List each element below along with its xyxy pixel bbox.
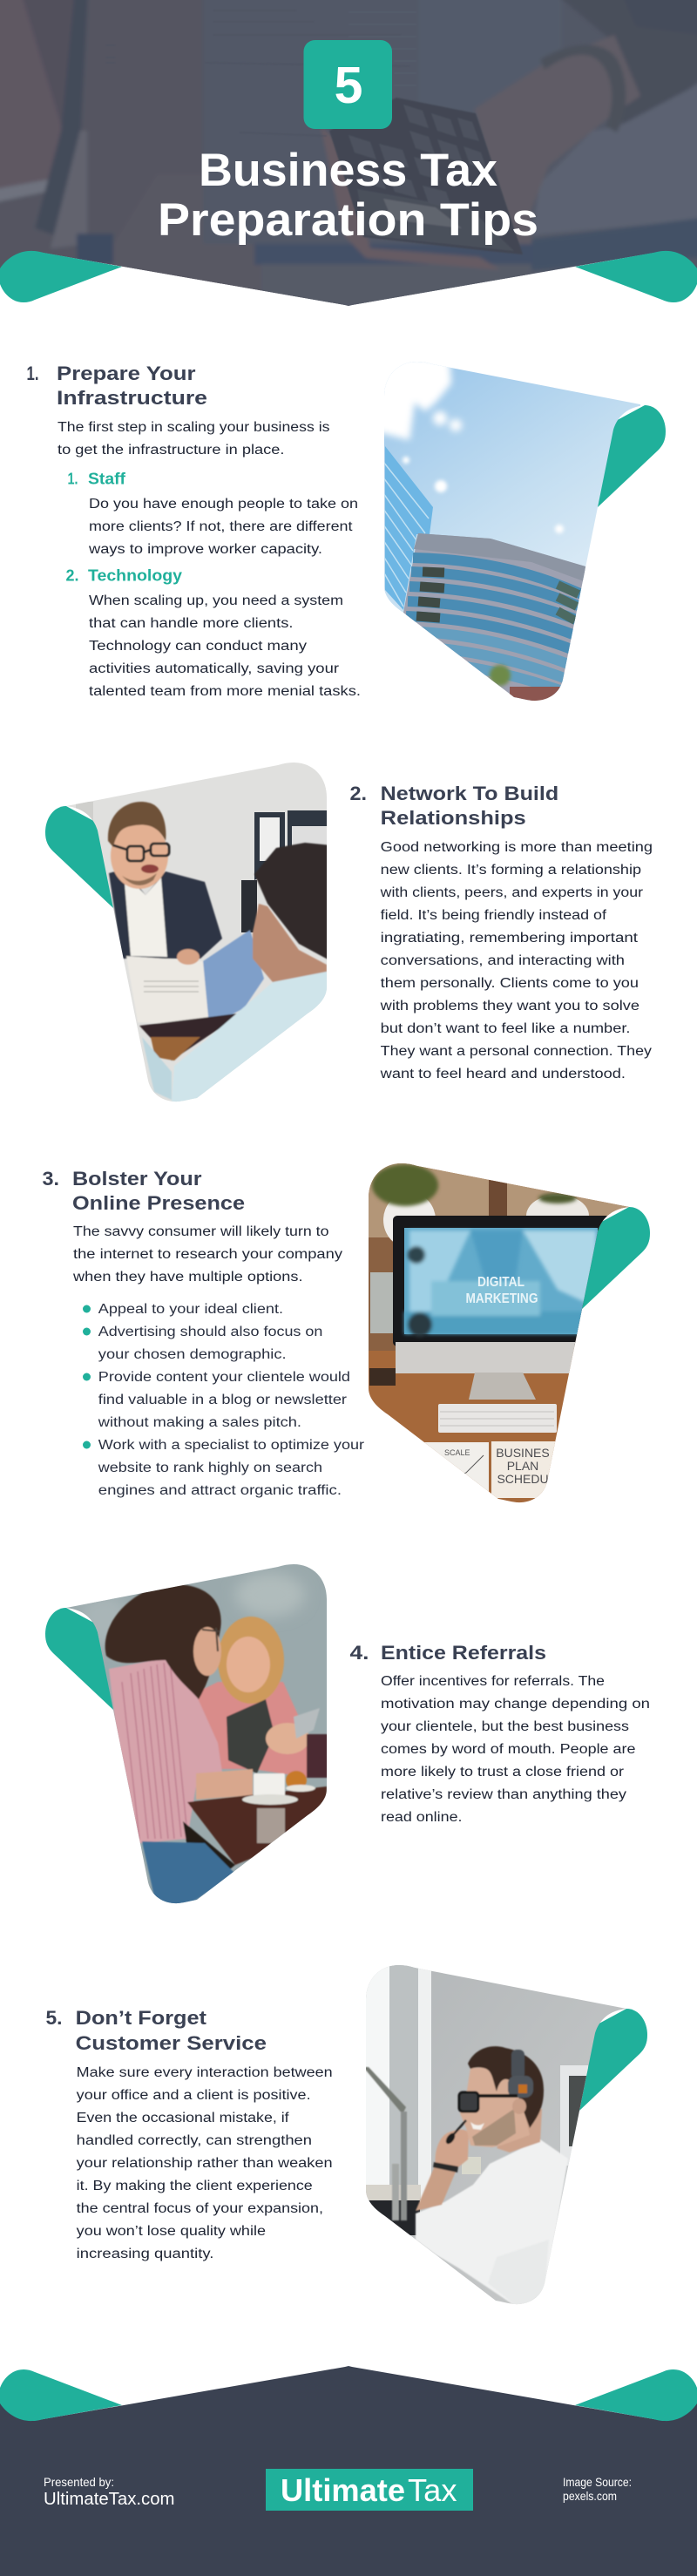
sub-item: staff: ways to improve worker capacity. xyxy=(88,542,322,557)
section 1 heading: 1. xyxy=(26,363,38,384)
section 2 paragraph: want to feel heard and understood. xyxy=(380,1067,626,1081)
section 3 photo: desktop monitor on a wooden desk xyxy=(366,1159,636,1508)
header panel xyxy=(0,0,697,309)
sub-item: technology: Technology xyxy=(88,566,182,584)
section 2 paragraph: They want a personal connection. They xyxy=(381,1044,652,1059)
section 3 heading: Online Presence xyxy=(72,1192,245,1214)
section 3 teal accent xyxy=(573,1207,650,1309)
section 2 paragraph: with problems they want you to solve xyxy=(380,999,639,1013)
section 3 bullet list xyxy=(83,1302,364,1498)
section 5 paragraph: increasing quantity. xyxy=(77,2247,213,2261)
section 5 paragraph: your relationship rather than weaken xyxy=(77,2156,333,2171)
section 4 paragraph: relative’s review than anything they xyxy=(381,1787,626,1802)
section 2 heading: 2. xyxy=(350,783,367,804)
title: Preparation Tips xyxy=(158,194,538,246)
section 2 paragraph: Good networking is more than meeting xyxy=(381,840,653,855)
section 3 intro text: when they have multiple options. xyxy=(72,1270,303,1285)
section 5 paragraph: Even the occasional mistake, if xyxy=(77,2111,289,2125)
section 2 paragraph: new clients. It’s forming a relationship xyxy=(381,863,641,878)
sub-item: technology: talented team from more menial tasks. xyxy=(89,684,361,699)
image source: Image Source: xyxy=(563,2475,632,2489)
image source: pexels.com xyxy=(563,2489,617,2503)
image source xyxy=(563,2475,632,2503)
section 2 teal accent xyxy=(45,806,122,908)
section 1: infrastructure xyxy=(26,353,666,706)
section 5 paragraph: handled correctly, can strengthen xyxy=(77,2133,312,2148)
section 4 paragraph: your clientele, but the best business xyxy=(381,1719,629,1734)
section 3 intro text xyxy=(72,1224,342,1285)
section 4 paragraph: Offer incentives for referrals. The xyxy=(381,1674,605,1689)
section 5 paragraph: your office and a client is positive. xyxy=(77,2088,311,2103)
section 2 paragraph: ingratiating, remembering important xyxy=(381,931,639,946)
section 2: networking xyxy=(44,758,653,1107)
logo: Tax xyxy=(408,2472,457,2508)
section 1 teal accent xyxy=(589,405,666,507)
section 3 heading: Bolster Your xyxy=(72,1168,202,1190)
section 1 heading: Infrastructure xyxy=(57,387,207,409)
section 3 bullet list: without making a sales pitch. xyxy=(98,1415,301,1430)
section 5 heading: Don’t Forget xyxy=(76,2007,207,2029)
section 3 bullet list: Work with a specialist to optimize your xyxy=(98,1438,364,1453)
sub-item: technology: activities automatically, saving your xyxy=(89,661,339,676)
section 2 paragraph: but don’t want to feel like a number. xyxy=(381,1021,631,1036)
sub-item: staff: Do you have enough people to take on xyxy=(89,497,358,512)
section 3 photo: desktop monitor on a wooden desk: DIGITAL xyxy=(477,1275,524,1290)
section 5 paragraph: you won’t lose quality while xyxy=(77,2224,266,2239)
section 3: online presence xyxy=(42,1159,650,1508)
section 5 paragraph: Make sure every interaction between xyxy=(77,2065,333,2080)
section 4 heading: Entice Referrals xyxy=(381,1642,546,1664)
section 3 bullet list: website to rank highly on search xyxy=(98,1461,322,1475)
section 5: customer service xyxy=(45,1961,647,2309)
section 3 photo: desktop monitor on a wooden desk: SCHEDU xyxy=(497,1472,549,1486)
section 1 intro text xyxy=(58,420,330,458)
sub-item: staff: Staff xyxy=(88,471,126,488)
footer panel xyxy=(0,2366,697,2576)
number badge: 5 xyxy=(335,57,362,114)
logo: Ultimate xyxy=(281,2472,405,2508)
section 2 photo: two men reviewing a document xyxy=(66,763,327,1102)
section 2 heading: Network To Build xyxy=(381,783,558,804)
sub-item: staff xyxy=(68,471,358,557)
section 3 bullet list: Appeal to your ideal client. xyxy=(98,1302,283,1317)
title: Business Tax xyxy=(199,145,498,196)
section 2 paragraph: with clients, peers, and experts in your xyxy=(380,885,643,900)
section 5 paragraph xyxy=(77,2065,333,2261)
section 4 heading: 4. xyxy=(350,1642,369,1664)
section 2 paragraph: them personally. Clients come to you xyxy=(381,976,639,991)
section 3 intro text: the internet to research your company xyxy=(73,1247,342,1262)
section 3 photo: desktop monitor on a wooden desk: PLAN xyxy=(507,1459,538,1473)
section 5 photo: man with a headset on a call xyxy=(362,1961,632,2309)
section 2 heading xyxy=(350,783,558,829)
footer right teal wing xyxy=(575,2369,697,2421)
sub-item: staff: more clients? If not, there are different xyxy=(89,519,353,534)
section 4 paragraph xyxy=(381,1674,650,1825)
section 3 bullet list: find valuable in a blog or newsletter xyxy=(98,1393,347,1407)
sub-item: technology: 2. xyxy=(66,566,78,584)
section 1 heading: Prepare Your xyxy=(57,363,196,384)
section 4: referrals xyxy=(44,1560,650,1908)
footer left teal wing xyxy=(0,2369,122,2421)
sub-item: technology: Technology can conduct many xyxy=(89,639,307,654)
section 4 photo: two women at a cafe table xyxy=(66,1564,327,1903)
section 5 paragraph: the central focus of your expansion, xyxy=(77,2201,323,2216)
sub-item: staff: 1. xyxy=(68,471,78,488)
section 1 intro text: The first step in scaling your business is xyxy=(58,420,330,435)
title xyxy=(158,145,538,246)
section 1 photo: office building and sky xyxy=(375,353,640,706)
presented by xyxy=(44,2475,174,2509)
section 1 heading xyxy=(26,363,207,409)
section 4 paragraph: more likely to trust a close friend or xyxy=(381,1765,624,1779)
header background photo: calculator and paperwork under dark overlay xyxy=(0,0,697,309)
right teal wing xyxy=(575,251,697,302)
section 3 bullet list: engines and attract organic traffic. xyxy=(98,1483,342,1498)
sub-item: technology: When scaling up, you need a system xyxy=(89,593,343,608)
sub-item: technology: that can handle more clients. xyxy=(89,616,293,631)
section 4 paragraph: motivation may change depending on xyxy=(381,1697,650,1712)
section 5 heading: 5. xyxy=(45,2007,63,2029)
section 3 bullet list: Advertising should also focus on xyxy=(98,1325,322,1339)
presented by: Presented by: xyxy=(44,2475,114,2489)
logo xyxy=(266,2469,473,2511)
section 1 intro text: to get the infrastructure in place. xyxy=(58,443,284,458)
section 4 paragraph: read online. xyxy=(381,1810,462,1825)
section 3 photo: desktop monitor on a wooden desk: BUSINES xyxy=(496,1446,550,1460)
section 5 teal accent xyxy=(571,2009,647,2111)
section 2 paragraph: field. It’s being friendly instead of xyxy=(381,908,607,923)
section 3 heading xyxy=(42,1168,245,1214)
left teal wing xyxy=(0,251,122,302)
section 5 heading xyxy=(45,2007,267,2054)
section 4 paragraph: comes by word of mouth. People are xyxy=(381,1742,636,1757)
sub-item: technology xyxy=(66,566,361,699)
section 3 bullet list: your chosen demographic. xyxy=(98,1347,287,1362)
section 3 intro text: The savvy consumer will likely turn to xyxy=(73,1224,329,1239)
section 2 paragraph xyxy=(380,840,653,1081)
section 2 heading: Relationships xyxy=(381,807,526,829)
number badge xyxy=(303,40,392,129)
section 3 bullet list: Provide content your clientele would xyxy=(98,1370,350,1385)
section 3 heading: 3. xyxy=(42,1168,59,1190)
section 2 paragraph: conversations, and interacting with xyxy=(381,953,625,968)
section 3 photo: desktop monitor on a wooden desk: SCALE xyxy=(444,1448,470,1457)
section 4 teal accent xyxy=(45,1608,122,1710)
presented by: UltimateTax.com xyxy=(44,2490,174,2509)
footer background xyxy=(0,2366,697,2576)
section 5 paragraph: it. By making the client experience xyxy=(77,2179,313,2193)
section 5 heading: Customer Service xyxy=(76,2032,267,2054)
section 3 photo: desktop monitor on a wooden desk: MARKETING xyxy=(465,1291,538,1306)
